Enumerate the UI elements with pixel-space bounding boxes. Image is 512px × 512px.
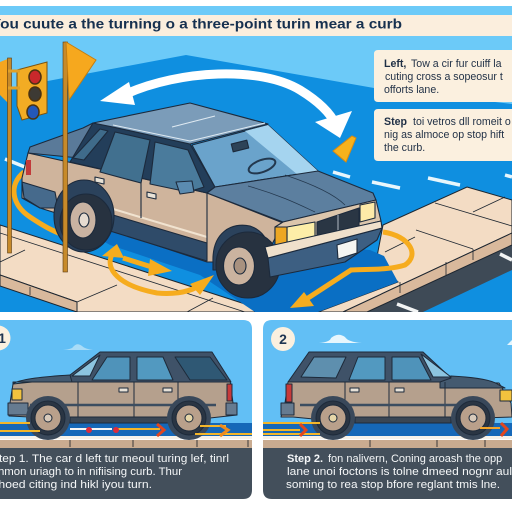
clouds <box>319 335 362 343</box>
rear trim <box>22 182 58 208</box>
callout: step <box>374 109 512 161</box>
title band <box>0 15 512 36</box>
rear wheel <box>167 396 211 440</box>
road <box>0 423 252 436</box>
suv roof and upper band <box>288 352 451 382</box>
tail light <box>26 160 31 175</box>
callout text: cuting cross a sopeosur t <box>385 71 503 83</box>
sill <box>355 417 451 423</box>
panel: step 1 <box>0 320 252 499</box>
left headlight <box>287 222 315 244</box>
front wheel <box>451 396 495 440</box>
hood <box>207 171 376 222</box>
callout text: offorts lane. <box>384 84 439 96</box>
body stripe <box>30 404 216 406</box>
caption bar <box>0 448 252 499</box>
caption bar <box>263 448 512 499</box>
suv hood <box>13 375 80 384</box>
rear wheel arch and wheel <box>54 180 114 252</box>
car shadow <box>105 232 398 312</box>
panel: step 2 <box>263 320 512 499</box>
sky <box>263 320 512 424</box>
traffic light pole <box>8 58 12 253</box>
bumper <box>268 228 382 277</box>
signal lights <box>29 70 41 84</box>
right headlight <box>360 202 375 222</box>
windshield <box>421 354 451 377</box>
rocker panel <box>112 214 208 262</box>
door seams <box>345 382 445 420</box>
headlight <box>500 390 512 401</box>
side windows <box>73 129 108 160</box>
callout text: the curb. <box>384 142 425 154</box>
bumpers <box>8 403 28 415</box>
truck bed <box>28 122 94 158</box>
dark asphalt strip <box>367 243 512 312</box>
grille <box>317 208 359 238</box>
motion arrows <box>0 423 252 436</box>
pickup truck main view <box>22 103 382 298</box>
orange pennant sign <box>66 42 96 100</box>
side mirror <box>176 181 194 194</box>
title text: You cuute a the turning o a three-point turin mear a curb <box>0 16 402 32</box>
caption text: Step 2. <box>287 453 323 465</box>
caption text: soming to rea stop bfore reglant tmis lne. <box>286 479 500 491</box>
suv facing left <box>8 352 237 440</box>
headlight <box>12 389 22 400</box>
curb sidewalk right <box>318 187 512 312</box>
side windows <box>92 357 130 380</box>
orange arc arrow rear <box>14 172 64 235</box>
badge: step 2 <box>271 327 295 351</box>
blue road surface <box>0 55 512 312</box>
sky <box>0 320 252 424</box>
road <box>263 423 512 436</box>
suv hood <box>440 376 505 388</box>
callout: left <box>374 50 512 102</box>
curb stripe <box>263 436 512 439</box>
big white turning arrow <box>100 74 352 138</box>
door handles <box>119 388 128 392</box>
amber cone marker <box>333 136 356 162</box>
cab greenhouse <box>70 123 215 193</box>
callout text: Step <box>384 116 407 128</box>
tail light <box>227 384 232 401</box>
front wheel arch and wheel <box>213 225 280 298</box>
suv facing right <box>281 352 512 440</box>
sky background <box>0 6 512 104</box>
rear wheel <box>311 396 355 440</box>
callout text: nig as almoce op stop hift <box>384 129 504 141</box>
cloud <box>63 344 93 350</box>
suv roof and upper band <box>70 352 231 382</box>
rear bumper <box>281 403 294 415</box>
curb stripe <box>0 436 252 439</box>
badge: step 2: 2 <box>279 331 287 347</box>
roof <box>93 103 268 144</box>
amber indicator <box>275 227 287 246</box>
door handles <box>350 388 359 392</box>
body stripe <box>300 404 490 406</box>
windshield <box>192 125 318 187</box>
front fascia <box>275 200 381 246</box>
sill <box>70 417 168 423</box>
license plate <box>337 239 357 259</box>
orange arrows around front wheel <box>102 244 214 295</box>
motion arrows <box>263 423 507 436</box>
rear-view mirror <box>231 140 249 152</box>
front wheel <box>26 396 70 440</box>
windshield <box>72 355 100 376</box>
door handles <box>95 177 104 184</box>
suv body <box>281 382 512 423</box>
door seams <box>78 382 178 420</box>
badge: step 1 <box>0 326 10 350</box>
callout text: Tow a cir fur cuiff la <box>411 58 502 70</box>
sign pole <box>63 42 68 272</box>
asphalt dashes <box>397 254 512 312</box>
steering wheel <box>248 158 276 174</box>
side windows <box>301 357 346 378</box>
side body <box>22 153 283 262</box>
callout text: Left, <box>384 58 406 70</box>
callout text: toi vetros dll romeit o <box>413 116 511 128</box>
caption text: lane unoi foctons is tolne dmeed nognr aul <box>287 466 512 478</box>
traffic light and signs <box>0 42 96 272</box>
lane dashes <box>5 159 512 188</box>
left pennant sign <box>0 59 8 102</box>
tail light <box>286 384 292 402</box>
curb sidewalk left <box>0 225 270 312</box>
suv body <box>9 378 237 423</box>
main illustration scene <box>0 6 512 312</box>
orange arrow around bumper <box>290 232 412 308</box>
traffic signal housing <box>17 62 47 120</box>
caption text: fon nalivern, Coning aroash the opp <box>328 453 502 465</box>
